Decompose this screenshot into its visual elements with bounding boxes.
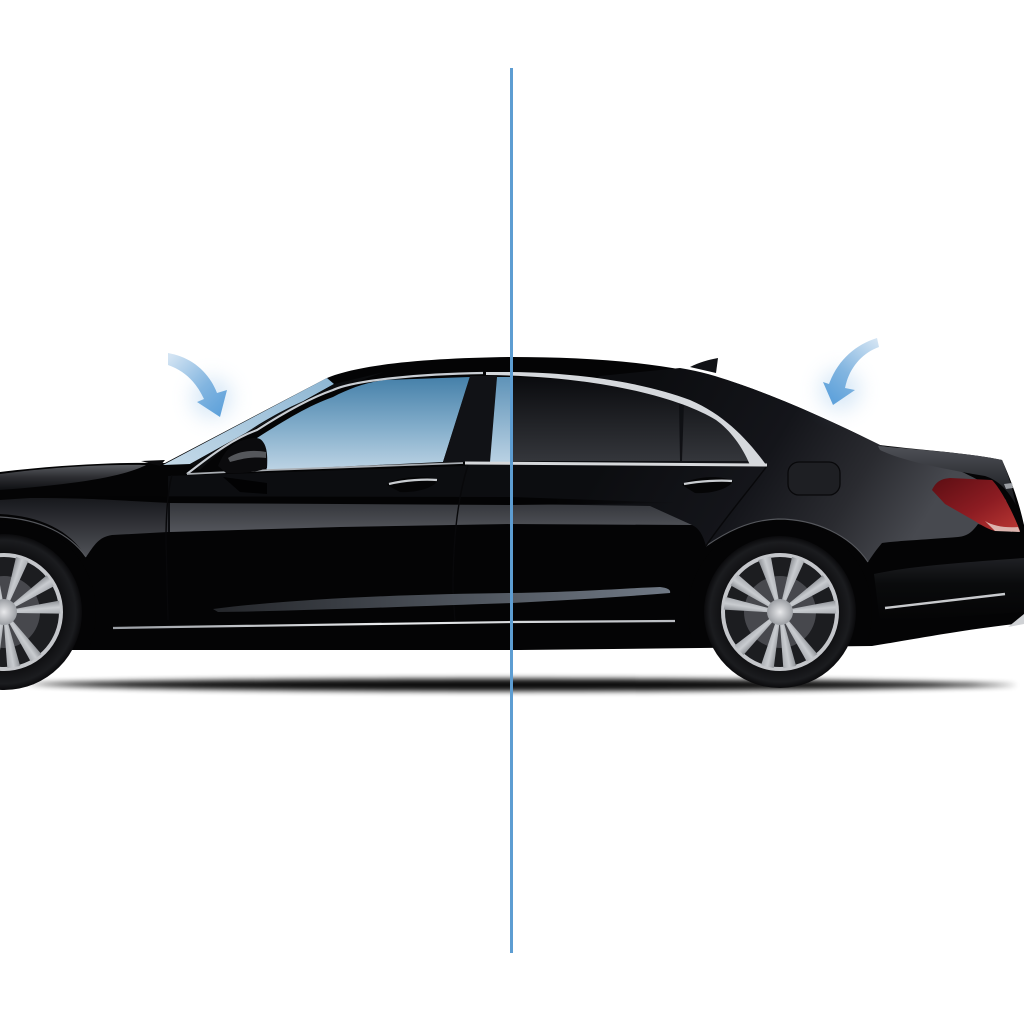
window chrome top rear xyxy=(486,372,767,466)
door highlight band xyxy=(170,503,692,532)
roof antenna fin xyxy=(690,358,718,373)
sill reflection xyxy=(213,587,670,612)
hood highlight xyxy=(0,465,146,490)
rear exhaust accent xyxy=(1008,614,1024,627)
arrow: windshield xyxy=(168,353,232,418)
B-pillar xyxy=(443,376,497,462)
belt chrome rear xyxy=(465,463,767,465)
door seams xyxy=(166,465,767,622)
window glass and trim xyxy=(141,358,767,474)
lower chrome strip xyxy=(113,621,675,628)
rear wheel xyxy=(704,536,856,688)
wheel arch lip rear xyxy=(706,519,868,562)
fuel door xyxy=(788,462,840,495)
tail lamp xyxy=(932,478,1020,531)
door and rear upper panels xyxy=(168,368,1012,562)
A-pillar xyxy=(190,372,384,470)
window chrome top front xyxy=(187,373,483,474)
door handles xyxy=(387,477,733,493)
belt shadow stripe xyxy=(36,496,680,505)
wiper xyxy=(141,460,165,466)
tail lamp lower highlight xyxy=(985,521,1020,532)
center divider line xyxy=(510,68,513,953)
front door glass xyxy=(257,377,470,470)
rear deck lid xyxy=(878,446,1016,505)
arrow: rear window xyxy=(820,338,879,410)
car body xyxy=(0,357,1024,650)
mirror xyxy=(218,438,267,494)
lower rear bumper panel xyxy=(874,558,1024,622)
belt chrome front xyxy=(187,463,463,474)
rear door front glass strip xyxy=(490,377,511,462)
trunk chrome accent xyxy=(1004,483,1013,489)
rear bumper chrome xyxy=(885,594,1005,608)
front wheel xyxy=(0,534,82,690)
body silhouette xyxy=(0,357,1024,650)
rear door glass xyxy=(513,377,680,461)
ground shadow xyxy=(25,678,1018,691)
wheel arch lip front xyxy=(0,517,86,557)
quarter glass xyxy=(682,403,749,461)
windshield xyxy=(163,378,334,465)
front fender panel xyxy=(0,498,168,557)
